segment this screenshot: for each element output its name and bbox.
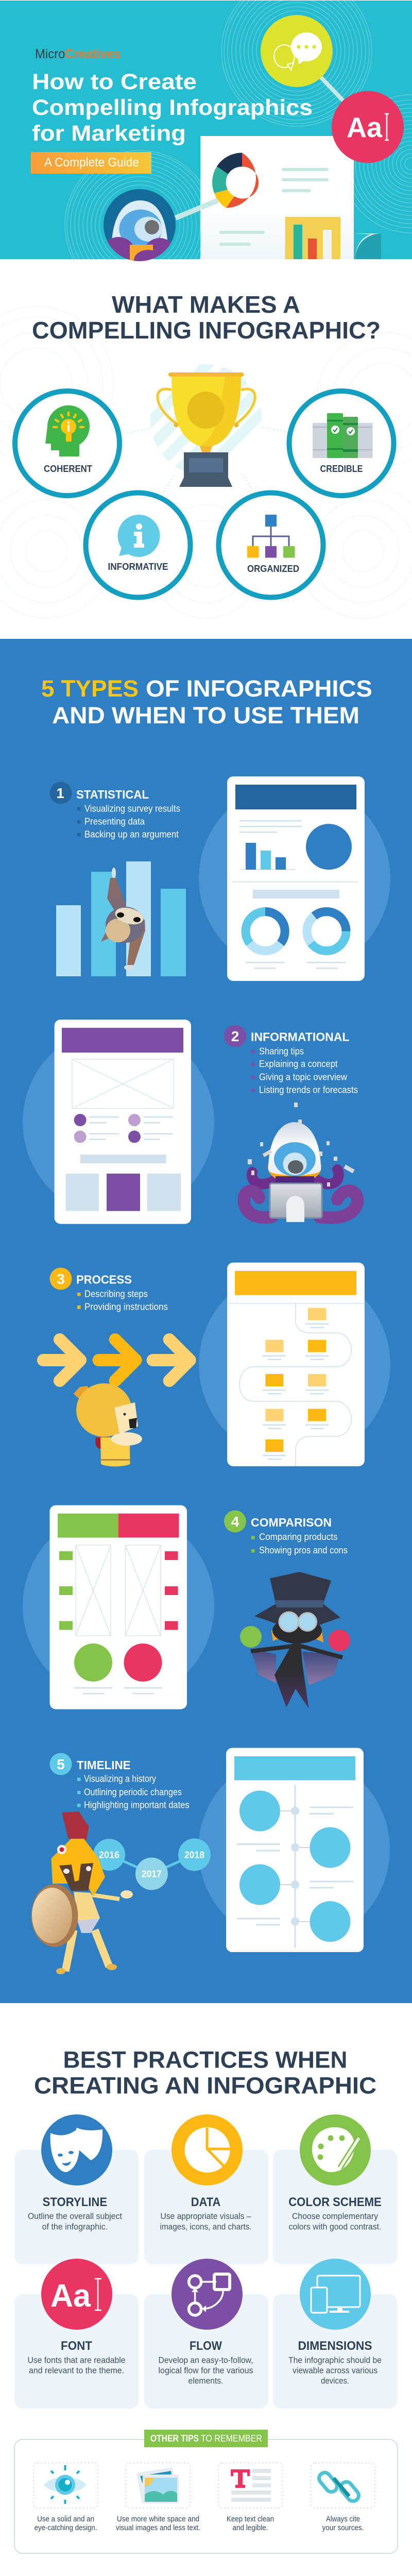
card: storyline bbox=[28, 2114, 122, 2231]
card: flow bbox=[159, 2259, 253, 2385]
description: images, icons, and charts. bbox=[160, 2222, 251, 2231]
card: dimensions bbox=[288, 2259, 382, 2385]
icon: font circle: Aa bbox=[347, 111, 382, 143]
page curl bbox=[354, 233, 381, 259]
description: and relevant to the theme. bbox=[29, 2365, 124, 2375]
mini bar chart bbox=[285, 217, 340, 259]
icon: Aa bbox=[41, 2259, 112, 2330]
type 3: process bbox=[43, 1263, 390, 1466]
icon: pictures bbox=[136, 2467, 179, 2504]
description: logical flow for the various bbox=[159, 2365, 253, 2375]
icon: flow diagram bbox=[171, 2259, 243, 2330]
icon: Aa: Aa bbox=[50, 2278, 91, 2314]
section heading bbox=[41, 675, 372, 728]
bullet list: Listing trends or forecasts bbox=[259, 1085, 358, 1095]
bullet list bbox=[77, 1289, 168, 1312]
year bubbles bbox=[93, 1838, 211, 1890]
subtitle badge bbox=[31, 152, 151, 174]
dotted frames bbox=[33, 2463, 375, 2508]
section heading: AND WHEN TO USE THEM bbox=[52, 702, 359, 728]
tip captions: Use more white space and bbox=[117, 2515, 199, 2523]
description: Develop an easy-to-follow, bbox=[159, 2355, 253, 2365]
description: colors with good contrast. bbox=[288, 2222, 381, 2231]
tab heading: TO REMEMBER bbox=[201, 2433, 262, 2444]
panel: 5 types of infographics bbox=[0, 639, 412, 2003]
label: ORGANIZED bbox=[247, 564, 299, 574]
panel: organized bbox=[218, 493, 323, 598]
year bubbles: 2016 bbox=[99, 1850, 119, 1860]
badge and title: STATISTICAL bbox=[76, 788, 149, 801]
heading: DATA bbox=[191, 2195, 220, 2209]
card backgrounds bbox=[14, 2149, 397, 2409]
template card bbox=[55, 1020, 191, 1224]
heading: FONT bbox=[61, 2339, 92, 2353]
tip captions: eye-catching design. bbox=[35, 2523, 97, 2532]
heading: STORYLINE bbox=[43, 2195, 107, 2209]
bullet list: Outlining periodic changes bbox=[84, 1787, 182, 1797]
section heading: WHAT MAKES A bbox=[112, 291, 300, 318]
decorative ring sets bbox=[64, 1, 412, 259]
description bbox=[28, 2211, 122, 2231]
panel: credible bbox=[289, 391, 393, 496]
tip captions bbox=[35, 2515, 364, 2532]
section heading: COMPELLING INFOGRAPHIC? bbox=[32, 317, 381, 344]
section heading bbox=[32, 291, 381, 344]
tip captions: Use a solid and an bbox=[37, 2515, 94, 2523]
badge and title: 4 bbox=[231, 1514, 239, 1530]
arrows bbox=[43, 1340, 190, 1381]
icon: link bbox=[317, 2470, 361, 2503]
subtitle badge: A Complete Guide bbox=[44, 156, 139, 170]
bullet list: Backing up an argument bbox=[84, 829, 179, 840]
bullet list bbox=[251, 1532, 348, 1555]
badge and title: COMPARISON bbox=[251, 1516, 332, 1529]
background rings bbox=[0, 307, 412, 618]
description: The infographic should be bbox=[288, 2355, 382, 2365]
description: Outline the overall subject bbox=[28, 2211, 122, 2221]
type 4: comparison bbox=[23, 1505, 350, 1709]
card: font bbox=[28, 2259, 126, 2375]
badge and title bbox=[224, 1025, 349, 1047]
label: CREDIBLE bbox=[320, 464, 363, 474]
bullet list bbox=[251, 1046, 358, 1095]
badge and title: 3 bbox=[57, 1271, 65, 1287]
character: bat with top hat bbox=[240, 1572, 350, 1708]
type 5: timeline bbox=[31, 1748, 390, 1974]
tab heading: OTHER TIPS bbox=[150, 2433, 199, 2444]
hero title bbox=[32, 70, 313, 146]
template card bbox=[49, 1505, 187, 1709]
trophy illustration bbox=[150, 364, 262, 487]
description bbox=[160, 2211, 251, 2231]
background circle bbox=[199, 1269, 390, 1461]
description: Use appropriate visuals – bbox=[161, 2211, 251, 2221]
bullet list: Explaining a concept bbox=[259, 1059, 338, 1069]
bullet list: Visualizing a history bbox=[84, 1774, 156, 1784]
character: yellow explorer bbox=[74, 1383, 142, 1466]
template card bbox=[227, 1263, 365, 1466]
description: devices. bbox=[321, 2376, 349, 2385]
badge and title: TIMELINE bbox=[77, 1758, 131, 1772]
tip captions: Keep text clean bbox=[227, 2515, 274, 2523]
icon: books bbox=[313, 413, 373, 458]
section heading: BEST PRACTICES WHEN bbox=[63, 2047, 347, 2073]
description bbox=[288, 2211, 381, 2231]
logo: MicroCreatives bbox=[35, 47, 121, 61]
donut chart bbox=[212, 152, 259, 208]
icon: org chart bbox=[247, 515, 295, 557]
badge and title: INFORMATIONAL bbox=[251, 1030, 349, 1044]
bullet list bbox=[77, 804, 180, 840]
description: viewable across various bbox=[293, 2365, 377, 2375]
panel: what makes a compelling infographic bbox=[0, 291, 412, 618]
character: sloth bbox=[101, 868, 145, 970]
badge and title: 2 bbox=[231, 1028, 239, 1044]
tab heading bbox=[144, 2430, 268, 2447]
icon: speech bubbles circle bbox=[261, 15, 333, 87]
section heading bbox=[34, 2047, 376, 2099]
background circle bbox=[23, 1026, 214, 1218]
badge and title bbox=[224, 1511, 332, 1532]
background circle bbox=[23, 1510, 214, 1702]
tip captions: and legible. bbox=[233, 2523, 268, 2532]
heading: FLOW bbox=[190, 2339, 222, 2353]
year bubbles: 2017 bbox=[142, 1869, 162, 1879]
character: octopus bbox=[244, 1103, 357, 1222]
character: spartan bbox=[31, 1811, 133, 1974]
bars bbox=[56, 861, 186, 976]
label: COHERENT bbox=[44, 464, 92, 474]
dotted connectors bbox=[124, 428, 287, 492]
card: data bbox=[160, 2114, 251, 2231]
icon: head with lightbulb bbox=[45, 405, 90, 456]
description: Use fonts that are readable bbox=[28, 2355, 126, 2365]
bullet list: Comparing products bbox=[259, 1532, 338, 1542]
hero title: Compelling Infographics bbox=[32, 95, 313, 120]
background circle bbox=[198, 1754, 390, 1945]
description: Choose complementary bbox=[292, 2211, 378, 2221]
icon: info bubble bbox=[117, 515, 160, 557]
type 2: informational bbox=[23, 1020, 358, 1224]
paper sheet bbox=[200, 136, 354, 259]
icon: eye character circle bbox=[104, 189, 176, 261]
tip captions: visual images and less text. bbox=[116, 2523, 200, 2532]
description bbox=[28, 2355, 126, 2375]
description bbox=[159, 2355, 253, 2385]
panel: informative bbox=[85, 493, 191, 598]
heading: DIMENSIONS bbox=[298, 2339, 372, 2353]
panel: other tips bbox=[14, 2430, 398, 2553]
panel: coherent bbox=[15, 391, 119, 496]
description: of the infographic. bbox=[42, 2222, 108, 2231]
icon: theatre masks bbox=[41, 2114, 112, 2185]
connector lines bbox=[176, 77, 343, 218]
bullet list: Showing pros and cons bbox=[259, 1545, 348, 1555]
badge and title bbox=[49, 782, 149, 804]
icon: text bbox=[231, 2469, 271, 2502]
description: elements. bbox=[188, 2376, 224, 2385]
hero title: for Marketing bbox=[32, 121, 186, 146]
bullet list: Visualizing survey results bbox=[84, 804, 180, 814]
bullet list: Giving a topic overview bbox=[259, 1072, 348, 1082]
icon: eye bbox=[44, 2465, 87, 2504]
paper text lines bbox=[219, 168, 329, 246]
section heading: OF INFOGRAPHICS bbox=[146, 675, 372, 702]
bullet list: Providing instructions bbox=[84, 1302, 168, 1312]
icon: devices bbox=[300, 2259, 371, 2330]
card: color scheme bbox=[288, 2114, 382, 2231]
badge and title: 5 bbox=[57, 1756, 65, 1772]
connector over paper bbox=[200, 200, 218, 208]
background circle bbox=[199, 783, 390, 974]
bullet list: Presenting data bbox=[84, 817, 145, 827]
badge and title: 1 bbox=[56, 785, 64, 801]
tip captions: your sources. bbox=[322, 2523, 364, 2532]
icon: font circle bbox=[332, 91, 404, 163]
heading: COLOR SCHEME bbox=[288, 2195, 382, 2209]
bullet list: Highlighting important dates bbox=[84, 1800, 190, 1810]
template card bbox=[226, 1748, 364, 1952]
badge and title bbox=[49, 1267, 132, 1290]
badge and title bbox=[49, 1753, 131, 1775]
year bubbles: 2018 bbox=[184, 1850, 204, 1860]
bullet list bbox=[77, 1774, 190, 1810]
description bbox=[288, 2355, 382, 2385]
label: INFORMATIVE bbox=[108, 562, 168, 572]
bullet list: Describing steps bbox=[84, 1289, 148, 1299]
tip captions: Always cite bbox=[326, 2515, 360, 2523]
bullet list: Sharing tips bbox=[259, 1046, 304, 1057]
type 1: statistical bbox=[49, 776, 390, 981]
icon: pie chart bbox=[171, 2114, 243, 2185]
panel: best practices bbox=[14, 2047, 398, 2553]
panel: hero header bbox=[0, 1, 412, 261]
section heading: CREATING AN INFOGRAPHIC bbox=[34, 2073, 376, 2099]
template card bbox=[227, 776, 365, 981]
hero title: How to Create bbox=[32, 70, 197, 94]
icon: palette bbox=[300, 2114, 371, 2185]
badge and title: PROCESS bbox=[76, 1273, 132, 1286]
section heading: 5 TYPES bbox=[41, 675, 139, 702]
